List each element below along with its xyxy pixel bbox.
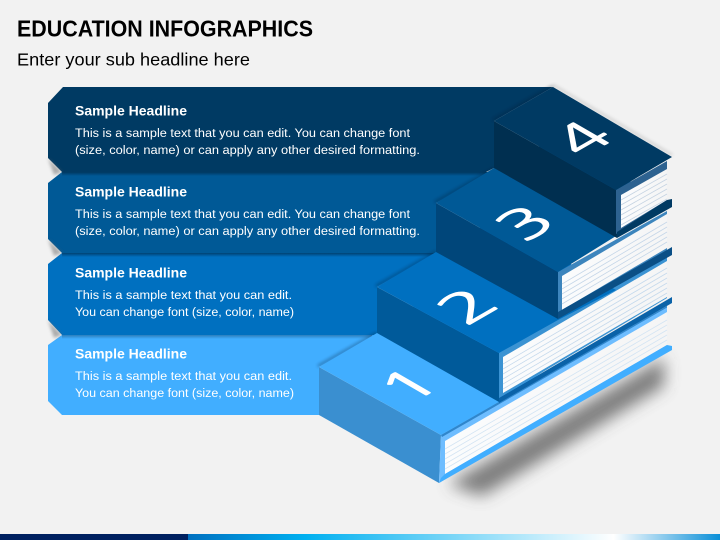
text block: banner 1: This is a sample text that you can edit. — [75, 369, 292, 383]
book 2 — [377, 220, 672, 403]
text block: banner 3: This is a sample text that you can edit. You can change font — [75, 207, 411, 221]
book 3 — [436, 140, 672, 319]
footer bar — [0, 534, 720, 540]
text block: banner 1: You can change font (size, color, name) — [75, 386, 294, 400]
book 1 — [319, 290, 672, 483]
text block: banner 2: Sample Headline — [75, 266, 187, 281]
book shadow — [448, 358, 664, 496]
title: EDUCATION INFOGRAPHICS — [17, 16, 313, 42]
banner 3 background — [48, 172, 494, 257]
number 4: 4 — [541, 115, 624, 162]
book 4 — [494, 87, 672, 238]
text block: banner 2 — [75, 266, 294, 319]
text block: banner 2: This is a sample text that you can edit. — [75, 288, 292, 302]
text block: banner 2: You can change font (size, color, name) — [75, 305, 294, 319]
text block: banner 1 — [75, 347, 294, 400]
banner 4 background — [48, 87, 553, 176]
text block: banner 4: This is a sample text that you can edit. You can change font — [75, 126, 411, 140]
subtitle: Enter your sub headline here — [17, 50, 250, 70]
number 1: 1 — [367, 361, 453, 410]
text block: banner 4: Sample Headline — [75, 104, 187, 118]
banner 1 background — [48, 335, 377, 415]
text block: banner 3: (size, color, name) or can apply any other desired formatting. — [75, 224, 420, 238]
text block: banner 4: (size, color, name) or can apply any other desired formatting. — [75, 143, 420, 157]
number 2: 2 — [425, 282, 511, 331]
text block: banner 4 — [75, 104, 420, 157]
text block: banner 3 — [75, 184, 420, 238]
banner 2 background — [48, 253, 436, 339]
ridge shadows — [318, 85, 672, 366]
text block: banner 3: Sample Headline — [75, 184, 187, 200]
text block: banner 1: Sample Headline — [75, 347, 187, 362]
number 3: 3 — [484, 199, 567, 247]
